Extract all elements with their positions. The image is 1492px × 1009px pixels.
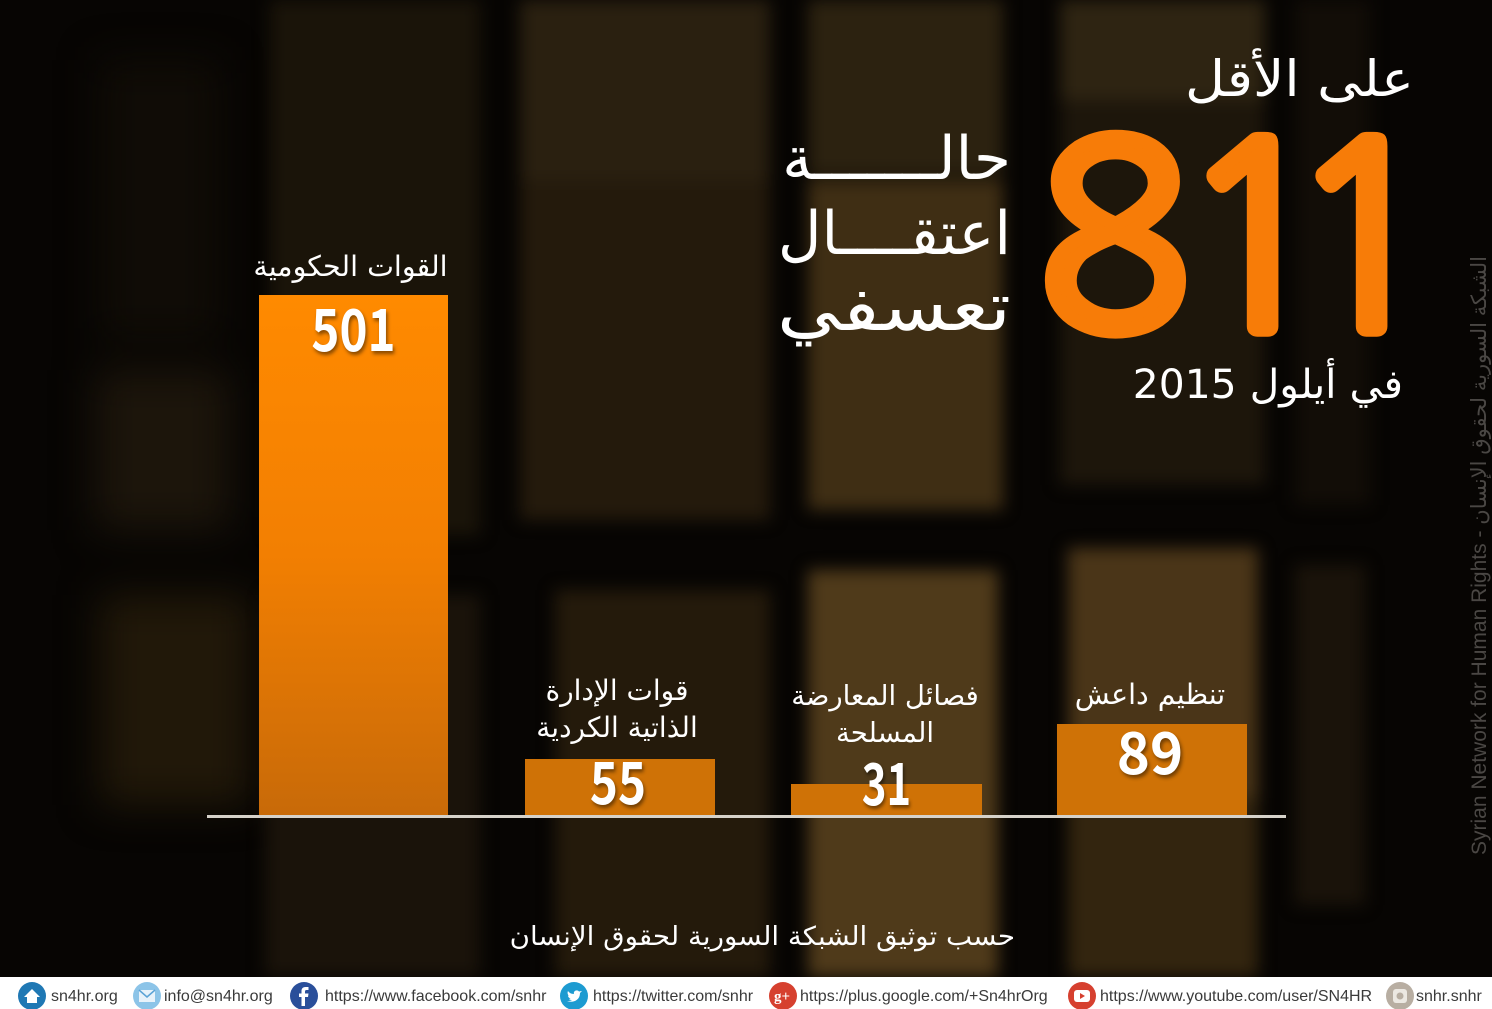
icon: youtube [1068, 982, 1096, 1009]
group: armed opposition factions [791, 680, 982, 822]
icon: instagram [1386, 982, 1414, 1009]
value 89: 89 [1117, 707, 1183, 791]
icon: twitter [560, 982, 588, 1009]
word: arrest: اعتقــــال [778, 199, 1011, 269]
headline: at least: على الأقل [1185, 50, 1414, 108]
link: email: info@sn4hr.org [164, 988, 273, 1005]
value 31: 31 [862, 738, 911, 822]
label: Kurdish self-administration forces: الذاتية الكردية [536, 711, 698, 744]
bar chart [253, 250, 1247, 822]
word: arbitrary: تعسفي [777, 268, 1011, 347]
link: google plus: https://plus.google.com/+Sn4hrOrg [800, 988, 1048, 1005]
label: armed opposition factions: المسلحة [836, 717, 934, 749]
icon: facebook [290, 982, 318, 1009]
label: government forces: القوات الحكومية [253, 250, 448, 283]
link: facebook: https://www.facebook.com/snhr [325, 988, 546, 1005]
digit 1: 1 [1286, 110, 1441, 366]
label: ISIS: تنظيم داعش [1075, 678, 1225, 711]
footer contact strip [0, 977, 1492, 1009]
bar: 89 [1057, 724, 1247, 815]
label: Kurdish self-administration forces: قوات الإدارة [545, 674, 689, 707]
word: cases: حالـــــــة [782, 124, 1011, 194]
group: government forces [253, 250, 448, 815]
date: September 2015: في أيلول 2015 [1133, 362, 1403, 408]
label: Kurdish self-administration forces [536, 674, 698, 744]
icon: google plus: g+ [774, 989, 790, 1005]
headline: arbitrary arrest cases [777, 124, 1011, 347]
bar: 55 [525, 759, 715, 815]
value 501: 501 [311, 284, 396, 368]
group: ISIS [1057, 678, 1247, 815]
bar: 31 [791, 784, 982, 815]
digit 1: 1 [1177, 110, 1332, 366]
link: instagram: snhr.snhr [1416, 988, 1482, 1005]
digit 8: 8 [1037, 110, 1192, 366]
vertical watermark: Syrian Network for Human Rights - الشبكة السورية لحقوق الإنسان [1468, 256, 1491, 855]
icon: google plus [769, 982, 797, 1009]
big number 811 [1037, 110, 1441, 366]
label: armed opposition factions [791, 680, 979, 749]
value 55: 55 [590, 737, 646, 821]
label: armed opposition factions: فصائل المعارضة [791, 680, 979, 712]
chart baseline [207, 815, 1286, 818]
link: twitter: https://twitter.com/snhr [593, 988, 753, 1005]
icon: website [18, 982, 46, 1009]
link: website: sn4hr.org [51, 988, 118, 1005]
icon: email [133, 982, 161, 1009]
link: youtube: https://www.youtube.com/user/SN4HR [1100, 988, 1372, 1005]
group: Kurdish self-administration forces [525, 674, 715, 821]
source note: حسب توثيق الشبكة السورية لحقوق الإنسان [510, 922, 1015, 952]
bar: 501 [259, 295, 448, 815]
